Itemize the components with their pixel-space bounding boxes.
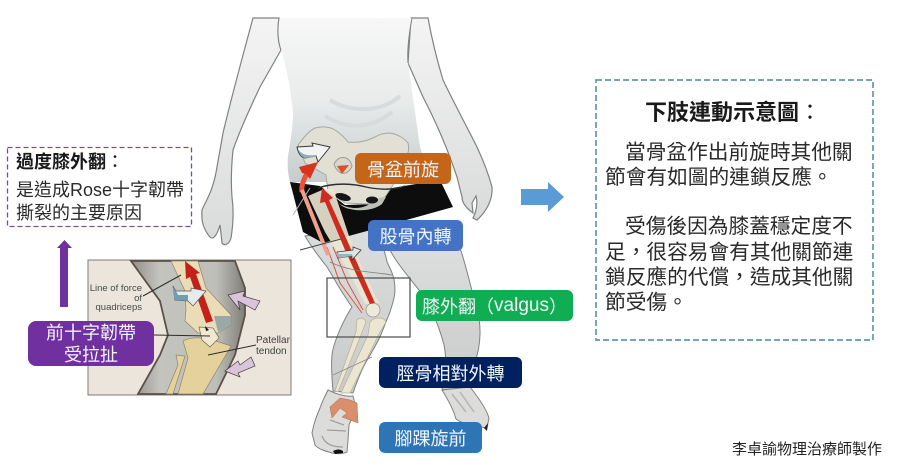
left arm [202,18,281,245]
label: ACL strain: 前十字韌帶 [46,322,136,342]
callout: excessive knee valgus [16,152,184,223]
lower-leg bones [335,303,386,393]
inset: leg silhouette [131,261,245,394]
right panel border [596,80,873,340]
label: tibia [379,357,522,388]
callout line 1: 是造成Rose十字韌帶 [16,180,184,200]
panel: explanation text [605,100,853,314]
paragraph 1: 當骨盆作出前旋時其他關 [625,141,853,164]
label: pelvis [355,153,451,184]
inset: femur [171,261,231,333]
pelvis [298,127,409,210]
label: knee valgus: 膝外翻（ ） [422,296,567,316]
inset: line of force label: Line of force [90,283,142,294]
right leg (rear) [390,248,489,431]
label: knee valgus: valgus [494,294,549,316]
callout heading: 過度膝外翻： [16,152,124,172]
label: femur [368,220,463,251]
arrow: blue right [521,182,564,212]
shorts [290,180,453,243]
femur bone [308,188,380,304]
paragraph 2 [605,215,853,314]
knee reference box [327,278,410,337]
label: ankle [379,422,482,453]
paragraph 2: 鎖反應的代償，造成其他關 [605,266,853,289]
left callout border [8,148,192,226]
femur rotation arrow [337,247,361,260]
label: ankle: 腳踝旋前 [394,428,466,448]
paragraph 1 [605,141,853,189]
pointer lines [293,188,392,375]
pelvis rotation arrow [297,143,330,162]
paragraph 2: 足，很容易會有其他關節連 [605,241,853,264]
force lines [299,162,375,313]
ankle rotation arrow [330,398,358,423]
callout line 2: 撕裂的主要原因 [16,203,142,223]
torso [278,18,432,182]
arrow: purple upward [57,240,72,307]
left leg [305,226,395,393]
label: ACL strain: 受拉扯 [64,344,118,364]
label: femur: 股骨內轉 [380,226,452,246]
inset: patellar tendon label: Patellar [256,335,291,346]
label: ACL strain [28,321,154,366]
paragraph 2: 受傷後因為膝蓋穩定度不 [625,215,853,238]
body figure [202,18,492,454]
panel heading: 下肢連動示意圖： [645,100,821,125]
left shoe [312,390,356,454]
inset: lower pressure arrow [225,357,255,377]
inset: line of force label: of [134,293,142,304]
paragraph 1: 節會有如圖的連鎖反應。 [605,166,833,189]
right arm [408,18,492,220]
paragraph 2: 節受傷。 [605,291,688,314]
credit: 李卓諭物理治療師製作 [732,441,882,458]
inset: line of force label: quadriceps [96,302,142,313]
inset: quadriceps force arrow [185,261,213,323]
inset: rotation arrow [173,286,206,306]
label: tibia: 脛骨相對外轉 [396,364,504,384]
inset: patellar tendon label: tendon [256,346,287,357]
inset: leader lines [143,275,256,355]
label: knee valgus [416,290,573,321]
inset: tibia and fibula [178,338,231,394]
knee anatomy inset [88,260,291,395]
inset: upper pressure arrow [228,291,260,310]
label: pelvis: 骨盆前旋 [367,160,439,180]
